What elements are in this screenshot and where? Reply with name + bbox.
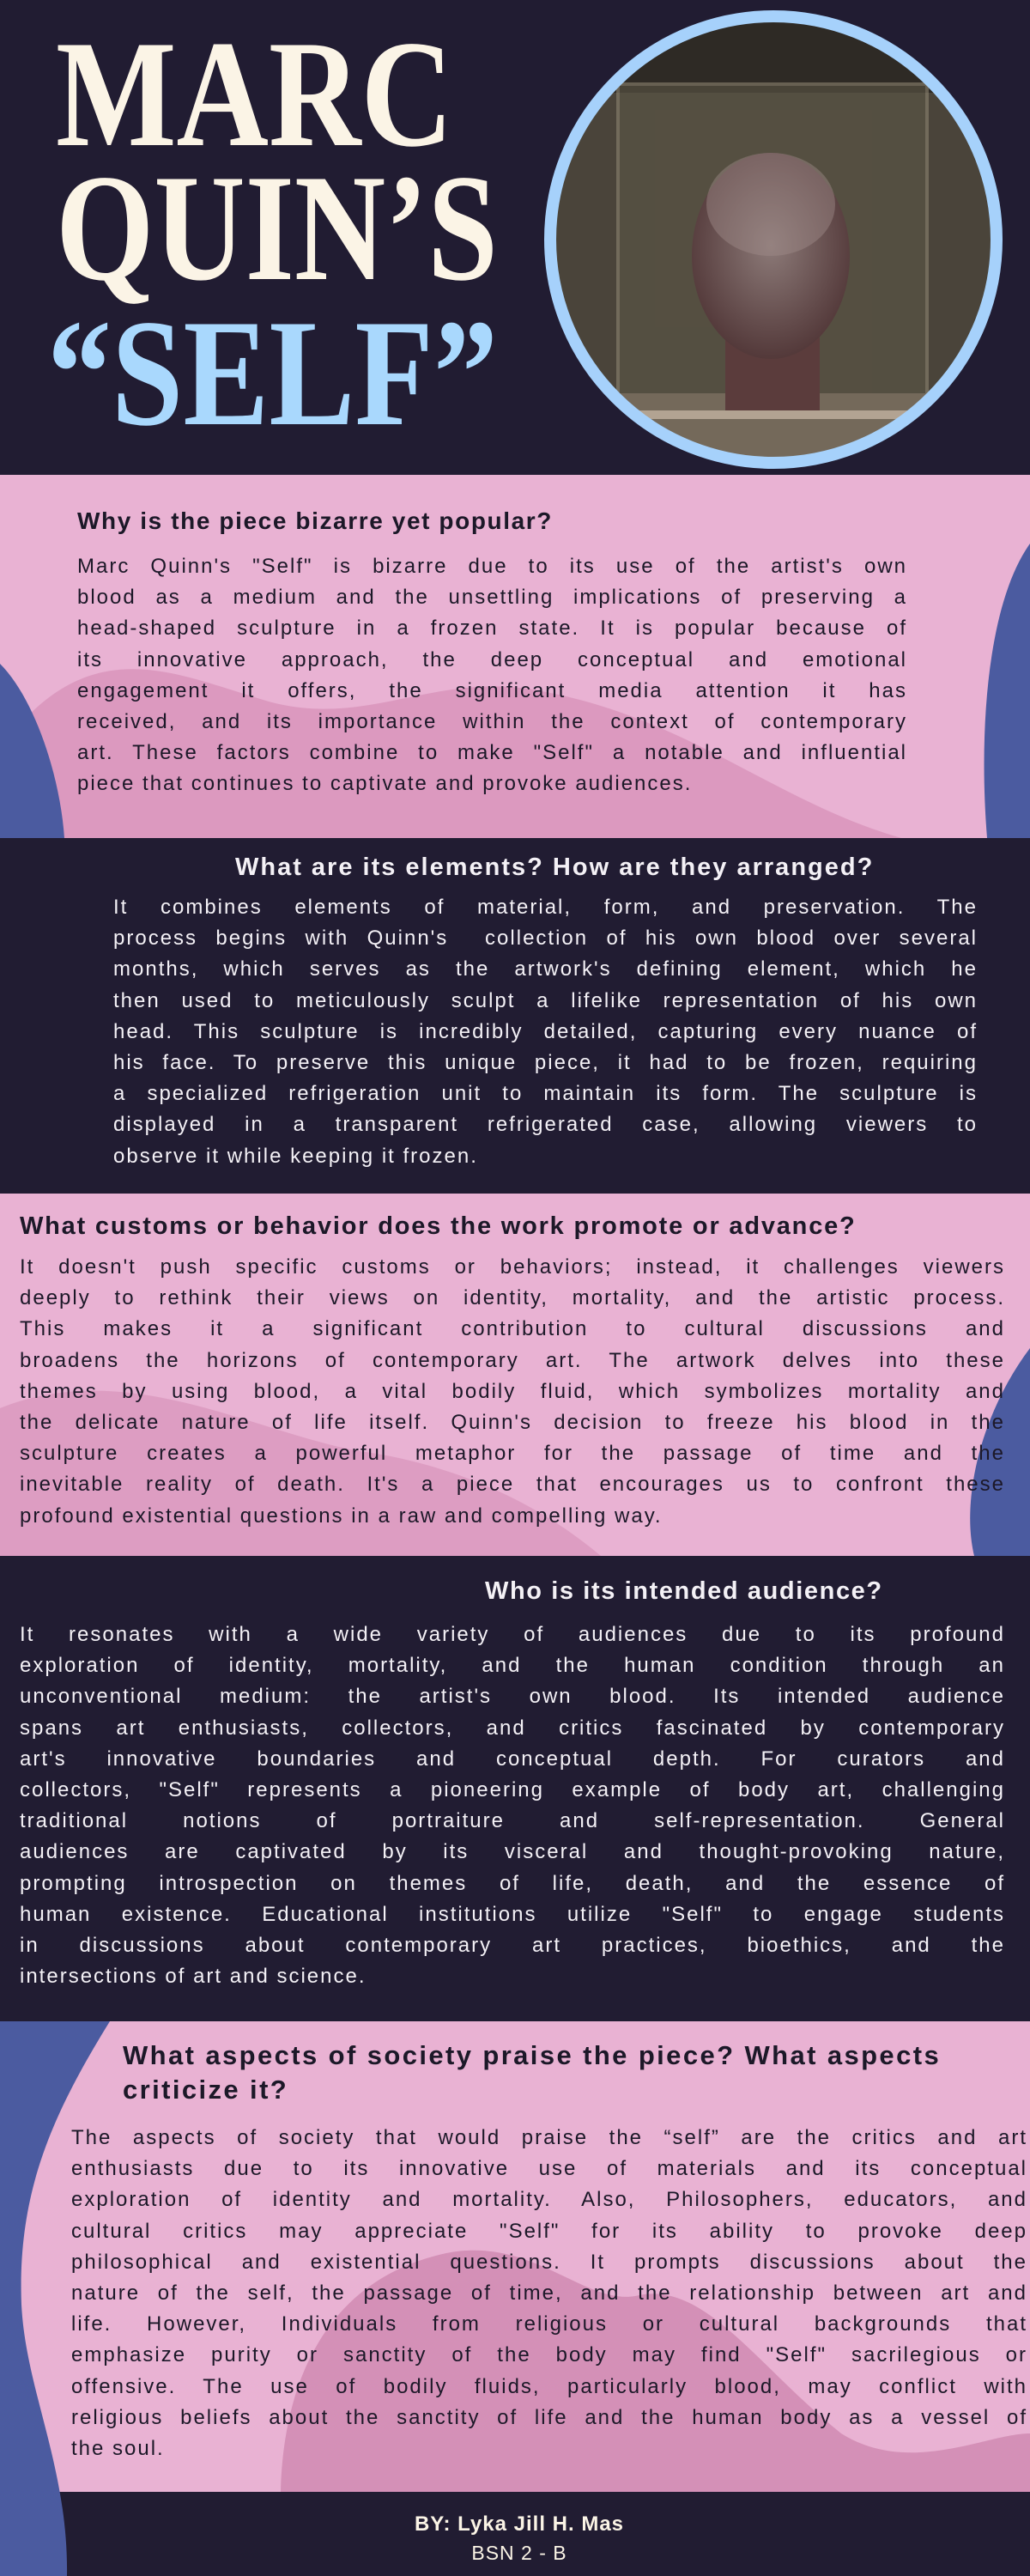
title: MARC (56, 9, 453, 179)
heading: criticize it? (123, 2075, 288, 2105)
text block: then used to meticulously sculpt a lifelike representation of his own (113, 989, 978, 1012)
text block: the soul. (71, 2437, 165, 2460)
text block: its innovative approach, the deep conceptual and emotional (77, 648, 907, 671)
panel: intended audience (0, 1556, 1030, 2022)
title (47, 9, 498, 458)
footer: author credit (415, 2512, 624, 2564)
header: title panel (53, 10, 1003, 469)
text block: It doesn't push specific customs or behaviors; instead, it challenges viewers (20, 1255, 1005, 1279)
text block: enthusiasts due to its innovative use of materials and its conceptual (71, 2157, 1027, 2180)
text block: process begins with Quinn's collection of his own blood over several (113, 927, 978, 950)
text block: piece that continues to captivate and provoke audiences. (77, 772, 692, 795)
text block: nature of the self, the passage of time, and the relationship between art and (71, 2281, 1027, 2305)
text block: head-shaped sculpture in a frozen state. It is popular because of (77, 617, 907, 640)
text block: religious beliefs about the sanctity of life and the human body as a vessel of (71, 2406, 1027, 2429)
panel: society praise and criticism (0, 2021, 1030, 2492)
text block (113, 896, 978, 1168)
text block: engagement it offers, the significant media attention it has (77, 679, 907, 702)
text block: prompting introspection on themes of life, death, and the essence of (20, 1872, 1005, 1894)
text block: intersections of art and science. (20, 1965, 367, 1988)
text block: spans art enthusiasts, collectors, and critics fascinated by contemporary (20, 1716, 1005, 1740)
text block: blood as a medium and the unsettling implications of preserving a (77, 586, 907, 609)
text block: a specialized refrigeration unit to maintain its form. The sculpture is (113, 1082, 978, 1105)
text block: deeply to rethink their views on identity, mortality, and the artistic process. (20, 1286, 1005, 1309)
text block: human existence. Educational institutions utilize "Self" to engage students (20, 1903, 1005, 1926)
text block: exploration of identity, mortality, and the human condition through an (20, 1654, 1005, 1677)
footer: author credit: BY: Lyka Jill H. Mas (415, 2512, 624, 2536)
decorative blob: left blue wave over last panel and footer (0, 2021, 110, 2576)
text block: in discussions about contemporary art practices, bioethics, and the (20, 1934, 1005, 1957)
text block: inevitable reality of death. It's a piece that encourages us to confront these (20, 1473, 1005, 1496)
panel: elements (0, 838, 1030, 1194)
photo: frozen head sculpture in circle (544, 10, 1003, 469)
panel: why bizarre yet popular (0, 475, 1030, 838)
text block: audiences are captivated by its visceral and thought-provoking nature, (20, 1840, 1005, 1863)
text block: philosophical and existential questions. It prompts discussions about the (71, 2251, 1027, 2274)
heading: Who is its intended audience? (485, 1577, 883, 1605)
text block: It resonates with a wide variety of audiences due to its profound (20, 1623, 1005, 1646)
text block: exploration of identity and mortality. Also, Philosophers, educators, and (71, 2188, 1027, 2211)
text block: displayed in a transparent refrigerated case, allowing viewers to (113, 1113, 978, 1136)
heading: What aspects of society praise the piece? What aspects (123, 2040, 941, 2070)
text block: broadens the horizons of contemporary art. The artwork delves into these (20, 1349, 1005, 1372)
text block (77, 555, 907, 795)
heading: What customs or behavior does the work promote or advance? (20, 1212, 857, 1240)
text block: art's innovative boundaries and conceptual depth. For curators and (20, 1747, 1005, 1771)
text block (20, 1623, 1005, 1988)
text block: themes by using blood, a vital bodily fluid, which symbolizes mortality and (20, 1380, 1005, 1403)
text block: Marc Quinn's "Self" is bizarre due to its use of the artist's own (77, 555, 907, 578)
text block: emphasize purity or sanctity of the body may find "Self" sacrilegious or (71, 2343, 1027, 2366)
panel: customs or behavior (0, 1194, 1030, 1556)
text block (20, 1255, 1005, 1527)
text block: The aspects of society that would praise the “self” are the critics and art (71, 2126, 1027, 2149)
text block: This makes it a significant contribution to cultural discussions and (20, 1317, 1005, 1340)
heading: What are its elements? How are they arranged? (235, 854, 874, 881)
text block: the delicate nature of life itself. Quinn's decision to freeze his blood in the (20, 1411, 1005, 1434)
text block: art. These factors combine to make "Self" a notable and influential (77, 741, 907, 764)
text block: observe it while keeping it frozen. (113, 1144, 478, 1168)
text block: months, which serves as the artwork's defining element, which he (113, 957, 978, 981)
text block: traditional notions of portraiture and self-representation. General (20, 1809, 1005, 1832)
text block: It combines elements of material, form, and preservation. The (113, 896, 978, 919)
text block: received, and its importance within the context of contemporary (77, 710, 907, 733)
text block: cultural critics may appreciate "Self" for its ability to provoke deep (71, 2220, 1027, 2243)
text block: head. This sculpture is incredibly detailed, capturing every nuance of (113, 1020, 978, 1043)
text block: unconventional medium: the artist's own blood. Its intended audience (20, 1685, 1005, 1708)
text block: collectors, "Self" represents a pioneering example of body art, challenging (20, 1778, 1005, 1801)
heading: Why is the piece bizarre yet popular? (77, 507, 553, 534)
text block: his face. To preserve this unique piece, it had to be frozen, requiring (113, 1051, 978, 1074)
footer: author credit: BSN 2 - B (471, 2542, 567, 2564)
text block: profound existential questions in a raw and compelling way. (20, 1504, 663, 1527)
heading (123, 2040, 941, 2105)
text block: offensive. The use of bodily fluids, particularly blood, may conflict with (71, 2375, 1027, 2397)
text block: sculpture creates a powerful metaphor for the passage of time and the (20, 1442, 1005, 1465)
text block (71, 2126, 1027, 2460)
text block: life. However, Individuals from religious or cultural backgrounds that (71, 2312, 1027, 2336)
